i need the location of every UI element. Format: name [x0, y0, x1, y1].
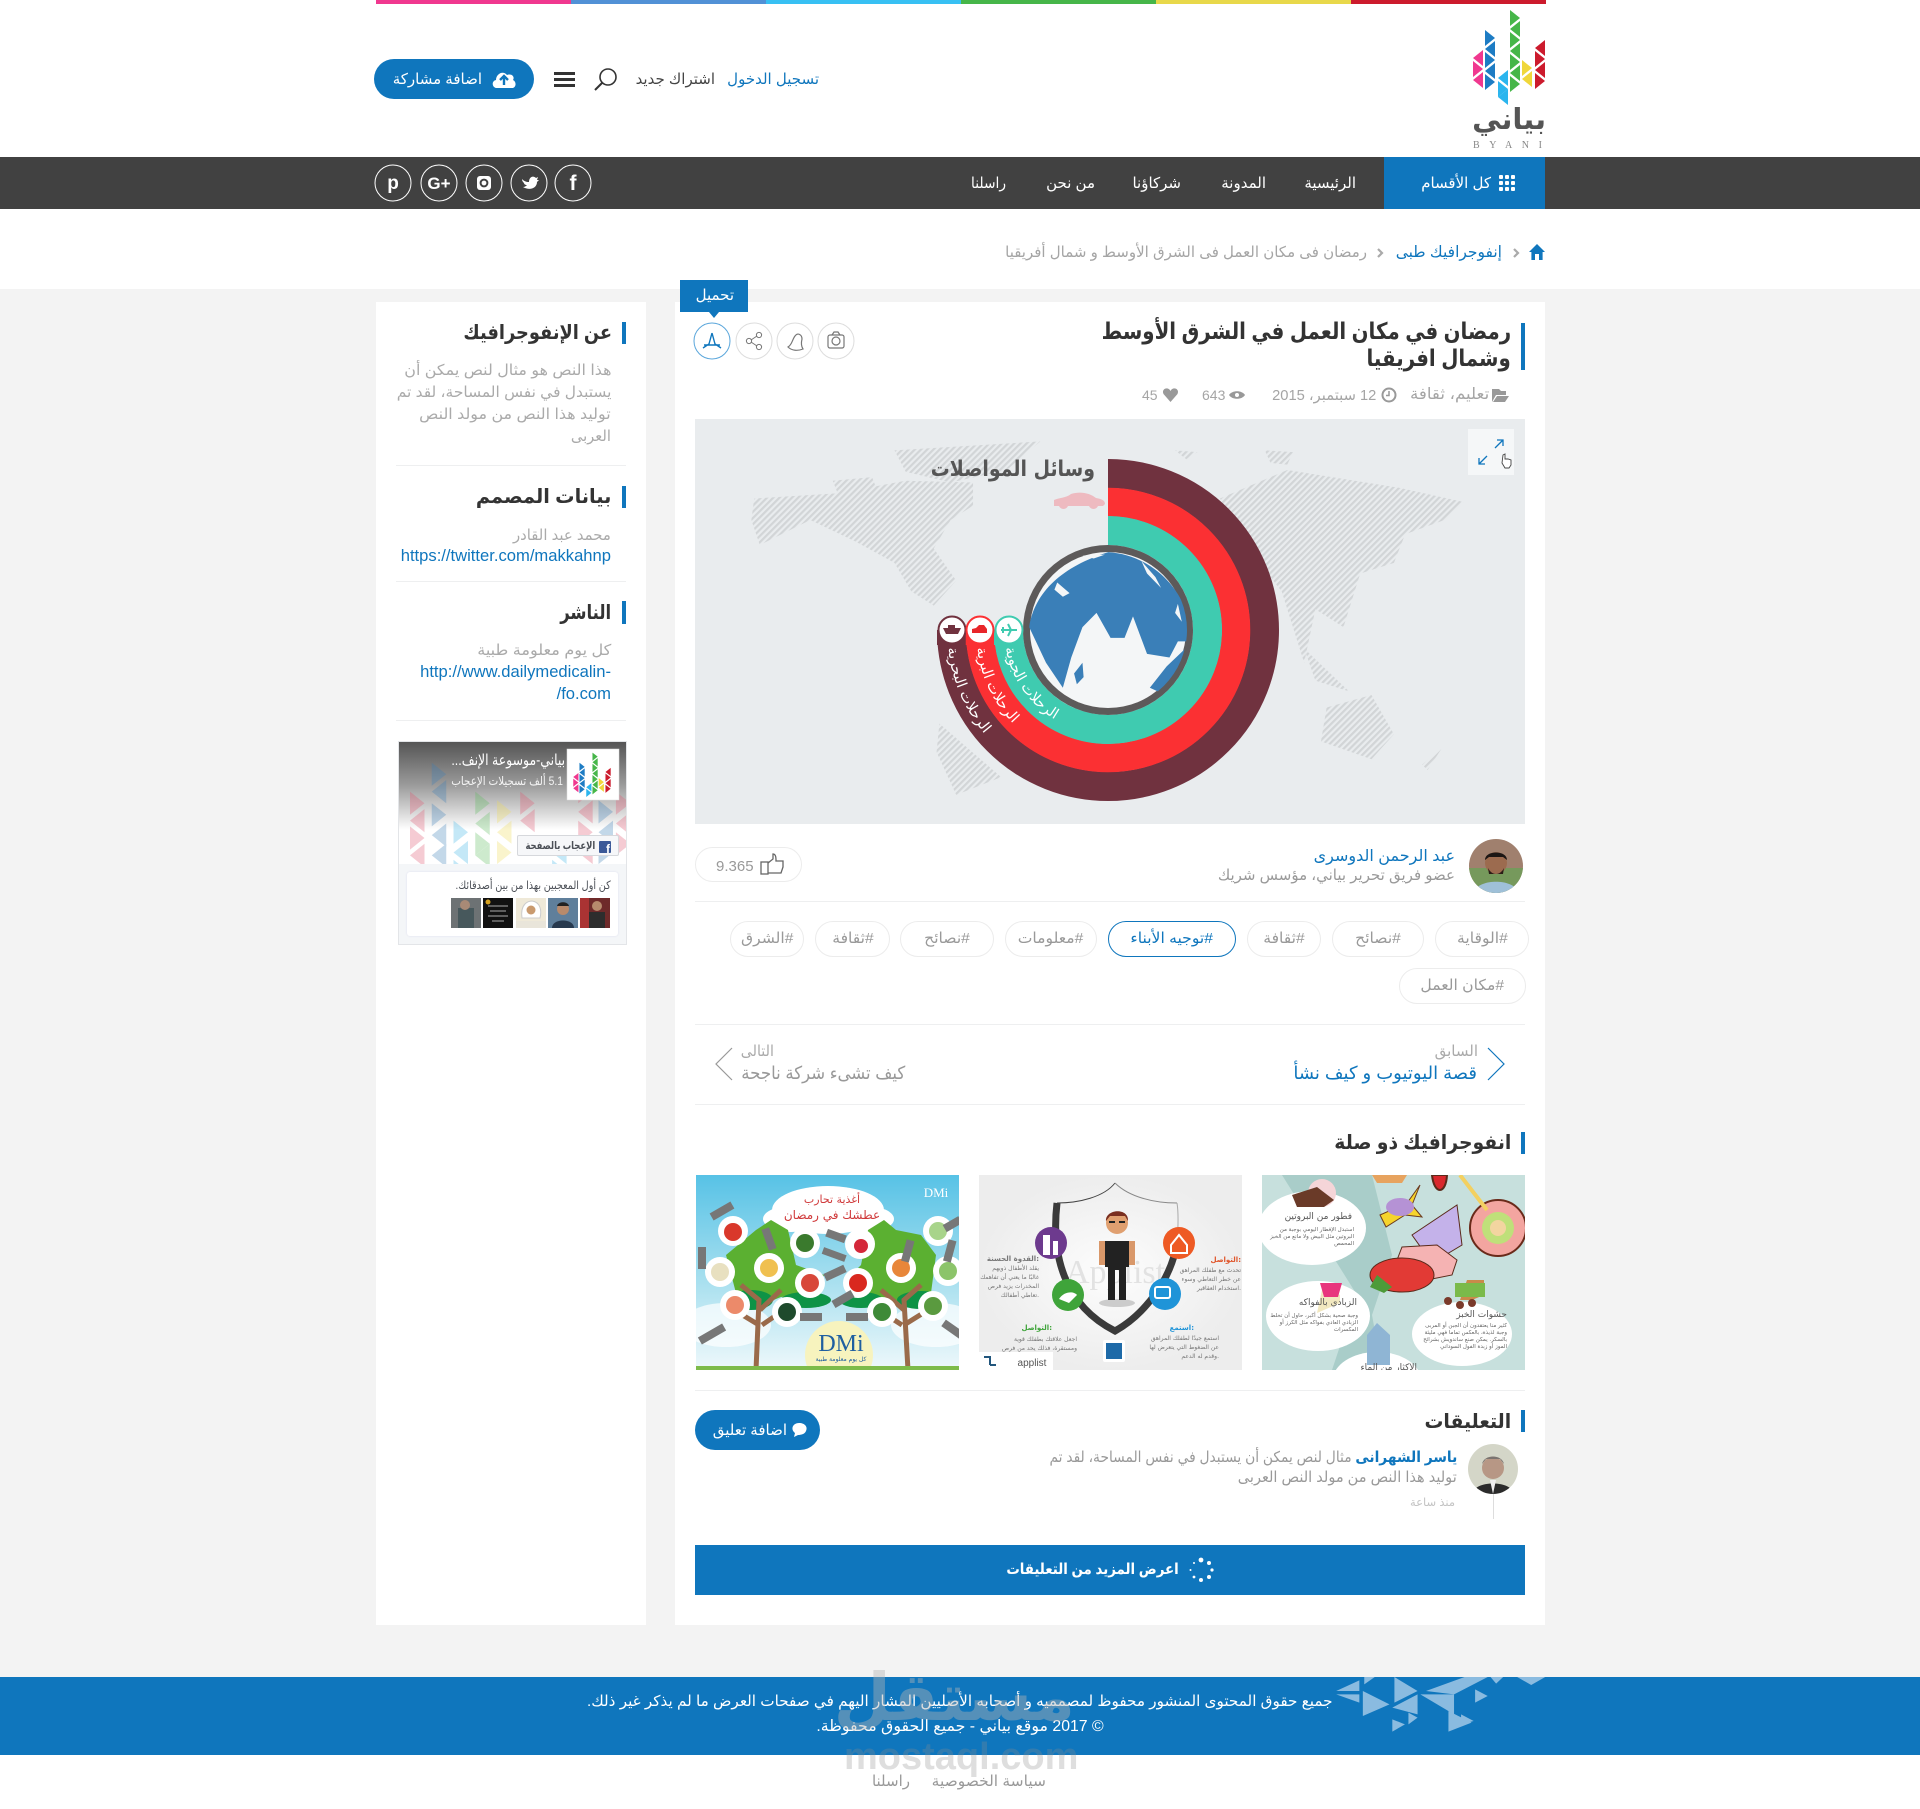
breadcrumb [1005, 242, 1545, 261]
login link: تسجيل الدخول [727, 71, 819, 88]
heading: related infographics: انفوجرافيك ذو صلة [1334, 1132, 1511, 1154]
facebook like button [517, 835, 619, 856]
logo: بياني [1472, 102, 1546, 136]
thumbnail: healthy snacks: فطور من البروتين [1285, 1212, 1352, 1222]
add contribution button [374, 59, 534, 99]
heading: designer data: بيانات المصمم [475, 486, 611, 508]
thumbnail: parenting shield: المخدرات يزيد فرص [988, 1283, 1039, 1290]
panel: sidebar [376, 302, 646, 1625]
world map [740, 430, 1470, 800]
social icons [374, 164, 592, 202]
publisher name: كل يوم معلومة طبية [477, 642, 611, 659]
thumbnail: healthy snacks: المحمص [1334, 1241, 1354, 1247]
all categories tab [1384, 157, 1545, 209]
thumbnail: healthy snacks: الزبادي العادي بفواكه مثل الكرز أو [1279, 1318, 1358, 1326]
tag: tips: #نصائح [1355, 930, 1401, 947]
facebook widget [399, 742, 626, 944]
meta: likes: 45 [1142, 387, 1158, 403]
tags [730, 921, 1529, 1004]
breadcrumb category link: إنفوجرافيك طبى [1396, 244, 1502, 261]
thumbnail: parenting shield: غالبًا ما يعني أن تفاهمك [980, 1273, 1039, 1281]
thumbnail: healthy snacks: الزبادي بالفواكه [1299, 1298, 1357, 1308]
thumbnail: parenting shield: عن الضغوط التي يتعرض لها [1149, 1344, 1219, 1351]
nav: blog: المدونة [1221, 175, 1266, 192]
about paragraph: توليد هذا النص من مولد النص [420, 406, 611, 422]
publisher link [420, 662, 611, 703]
thumbnail: healthy snacks [1262, 1175, 1525, 1370]
facebook page logo [566, 748, 620, 800]
thumbnail: parenting shield: Applist [1065, 1254, 1166, 1291]
next title: كيف تشىء شركة ناجحة [741, 1063, 905, 1083]
ring: air trips [1008, 530, 1208, 730]
ring labels: الرحلات الجوية [1004, 648, 1060, 719]
arrow: next [715, 1048, 732, 1080]
about title: عن الإنفوجرافيك [463, 322, 612, 344]
about paragraph: هذا النص هو مثال لنص يمكن أن [404, 362, 611, 378]
globe [1023, 545, 1193, 715]
thumbnail: food: عطشك في رمضان [784, 1208, 880, 1223]
copyright year line: © 2017 موقع بياني - جميع الحقوق محفوظة. [817, 1718, 1104, 1735]
thumbnail: food: أغذية تحارب [804, 1192, 860, 1206]
button label: اضافة مشاركة [393, 71, 482, 88]
thumbnail: parenting shield [979, 1175, 1242, 1370]
tag: parenting active [1108, 921, 1236, 957]
tag: prevention: #الوقاية [1457, 930, 1507, 947]
load more label: اعرض المزيد من التعليقات [1007, 1561, 1179, 1578]
panel: main article [675, 302, 1545, 1625]
ring: land trips [980, 502, 1236, 758]
watermark arabic: مستقل [834, 1660, 1075, 1734]
likes pill [695, 847, 802, 882]
tag: tips 2 [900, 921, 994, 957]
designer link: https://twitter.com/makkahnp [401, 546, 611, 565]
footer band [0, 1677, 1920, 1755]
comment time: منذ ساعة [1410, 1497, 1455, 1509]
heading: comments: التعليقات [1424, 1411, 1511, 1433]
footer link: contact: راسلنا [872, 1773, 910, 1790]
page background band [0, 289, 1920, 677]
tag: tips 2: #نصائح [924, 930, 970, 947]
tag: east: #الشرق [741, 930, 793, 947]
author role: عضو فريق تحرير بياني، مؤسس شريك [1218, 867, 1455, 884]
fullscreen button [1468, 429, 1514, 475]
action icons [694, 322, 854, 360]
thumbnail: parenting shield: عن خطر التعاطي وسوء [1182, 1276, 1241, 1283]
transport markers [938, 616, 1022, 644]
meta: icons [1163, 388, 1509, 402]
tag: tips [1332, 921, 1424, 957]
logo: BYANI [1473, 140, 1552, 151]
breadcrumb current page: رمضان فى مكان العمل فى الشرق الأوسط و شمال أفريقيا [1005, 244, 1367, 261]
tag: culture: #ثقافة [1263, 930, 1305, 947]
icon: cloud upload [492, 72, 516, 88]
nav: about: من نحن [1046, 175, 1095, 192]
previous title: قصة اليوتيوب و كيف نشأ [1293, 1063, 1477, 1083]
facebook cover [399, 742, 626, 864]
thumbnail: parenting shield: تعاطي أطفالك. [1001, 1291, 1039, 1299]
thumbnail: parenting shield: تحدث مع طفلك المراهق [1180, 1267, 1241, 1274]
friend photos [451, 898, 610, 928]
article meta row [1142, 386, 1509, 404]
navigation bar [0, 157, 1920, 209]
footer link: privacy: سياسة الخصوصية [932, 1773, 1046, 1790]
tag: prevention [1435, 921, 1529, 957]
next label: التالى [741, 1043, 774, 1060]
next article [715, 1043, 906, 1084]
tag: workplace [1399, 968, 1526, 1004]
social icons: f [570, 172, 578, 195]
likes count: 9.365 [716, 858, 754, 875]
author avatar [1469, 839, 1523, 893]
previous label: السابق [1435, 1043, 1478, 1060]
thumbnail: healthy snacks: وجبة صحية بشكل أكبر، حاول أن تخلط [1270, 1311, 1358, 1319]
icon: speech bubble [792, 1423, 807, 1437]
icon: spinner [1190, 1558, 1214, 1582]
copyright line: جميع حقوق المحتوى المنشور محفوظ لمصمميه و أصحابه الأصليين المشار اليهم في صفحات العرض ما لم يذكر غير ذلك. [587, 1693, 1333, 1710]
thumbnail: parenting shield: التواصل: [1210, 1256, 1241, 1264]
meta: date: 12 سبتمبر، 2015 [1272, 387, 1376, 404]
icon: facebook: f [606, 842, 611, 856]
ring labels: الرحلات البرية [975, 648, 1020, 722]
author name: عبد الرحمن الدوسرى [1314, 848, 1455, 865]
previous article [1293, 1043, 1505, 1084]
social icons: G+ [427, 174, 451, 193]
download label: تحميل [696, 287, 734, 304]
comment text: توليد هذا النص من مولد النص العربى [1238, 1469, 1457, 1486]
icon: facebook [599, 841, 611, 856]
commenter avatar [1468, 1444, 1518, 1494]
thumbnail: healthy snacks: البروتين مثل البيض ولا مانع من الخبز [1269, 1234, 1354, 1240]
thumbnail: parenting shield: applist [1018, 1358, 1047, 1369]
like label: الإعجاب بالصفحة [525, 840, 595, 852]
chart title: وسائل المواصلات [931, 456, 1095, 481]
thumbnail: food: DMi [818, 1331, 864, 1357]
heading: publisher: الناشر [560, 602, 611, 624]
watermark latin: mostaql.com [844, 1736, 1078, 1778]
thumbnail: food: كل يوم معلومة طبية [816, 1356, 867, 1363]
social icons: p [387, 173, 399, 194]
infographic image [695, 419, 1525, 824]
tag: workplace: #مكان العمل [1421, 977, 1504, 994]
icon: menu [554, 72, 575, 87]
tag: culture 2: #ثقافة [832, 930, 873, 947]
comment text: ياسر الشهرانى مثال لنص يمكن أن يستبدل في نفس المساحة، لقد تم [1049, 1449, 1457, 1466]
thumbnail: food: DMi [924, 1185, 949, 1200]
facebook page name: بياني-موسوعة الإنف... [451, 752, 565, 769]
article title [1102, 317, 1511, 372]
heading: about [396, 322, 626, 444]
nav: contact: راسلنا [971, 175, 1006, 192]
facebook likes count: 5.1 ألف تسجيلات الإعجاب [451, 774, 563, 788]
thumbnail: healthy snacks: حشوات الخبز [1455, 1310, 1507, 1320]
icon: search [594, 68, 617, 91]
friends line: كن أول المعجبين بهذا من بين أصدقائك. [456, 880, 611, 892]
ring labels: الرحلات البحرية [946, 648, 992, 733]
logo [1472, 10, 1552, 151]
designer name: محمد عبد القادر [513, 527, 611, 544]
icon: car [1054, 493, 1105, 509]
signup link: اشتراك جديد [636, 71, 715, 88]
about paragraph: العربى [571, 428, 611, 444]
meta: views: 643 [1202, 387, 1225, 403]
article title: رمضان في مكان العمل في الشرق الأوسط [1102, 318, 1511, 344]
download tab [680, 280, 748, 318]
thumbnail: parenting shield: وقدم له الدعم. [1181, 1353, 1219, 1360]
ring labels [946, 648, 1060, 733]
watermark [834, 1660, 1078, 1778]
about paragraph [396, 360, 611, 444]
tag: parenting active: #توجيه الأبناء [1131, 930, 1213, 947]
thumbnail: healthy snacks: المكسرات [1334, 1326, 1358, 1333]
about paragraph: يستبدل في نفس المساحة، لقد تم [396, 384, 611, 400]
thumbnail: parenting shield: القدوة الحسنة: [987, 1255, 1039, 1263]
ring: sea trips [952, 474, 1264, 786]
tag: information [1005, 921, 1097, 957]
thumbnail: parenting shield: التواصل: [1022, 1324, 1052, 1332]
icon: thumbs up [760, 853, 784, 875]
tag: information: #معلومات [1018, 930, 1084, 947]
load more comments bar [695, 1545, 1525, 1595]
thumbnail: parenting shield: يقلد الأطفال ذويهم [992, 1264, 1039, 1272]
article title: وشمال افريقيا [1367, 345, 1511, 371]
thumbnail: healthy snacks: وجبة لذيذة، بالعكس تماما فهي مليئة [1425, 1329, 1507, 1336]
thumbnail: parenting shield: استخدام العقاقير. [1196, 1285, 1241, 1292]
nav: all categories: كل الأقسام [1421, 175, 1491, 192]
meta: category: تعليم، ثقافة [1410, 386, 1489, 403]
facebook friends card [407, 872, 618, 936]
thumbnail: healthy snacks: كثير منا يعتقدون أن الجبن أو المربى [1425, 1321, 1507, 1329]
tag: culture 2 [815, 921, 890, 957]
nav: home: الرئيسية [1304, 175, 1356, 192]
comment text [1049, 1447, 1457, 1486]
thumbnail: parenting shield: استمع: [1170, 1324, 1194, 1332]
thumbnail: healthy snacks: بالسكر. يمكن صنع ساندويش بشرائح [1423, 1336, 1507, 1343]
thumbnail: healthy snacks: الموز أو زبدة الفول السوداني [1440, 1342, 1507, 1350]
tag: east [730, 921, 804, 957]
nav: partners: شركاؤنا [1132, 175, 1181, 192]
thumbnail: parenting shield: اجعل علاقتك بطفلك قوية [1014, 1336, 1077, 1343]
publisher link: http://www.dailymedicalin- [420, 662, 611, 681]
icon: grid [1499, 175, 1515, 191]
add comment button [695, 1410, 820, 1450]
thumbnail: food [696, 1175, 959, 1370]
thumbnail: healthy snacks: استبدل الإفطار اليومي بوجبة من [1280, 1227, 1354, 1233]
thumbnail: healthy snacks: الاكثار من الماء [1360, 1363, 1417, 1373]
icon: home [1529, 244, 1545, 260]
thumbnail: parenting shield: ومستقرة، فذلك يحد من فرص [1002, 1345, 1077, 1352]
button label: اضافة تعليق [713, 1422, 787, 1439]
publisher link: /fo.com [557, 684, 611, 703]
thumbnail: parenting shield: استمع جيدًا لطفلك المراهق [1151, 1335, 1219, 1342]
tag: culture [1247, 921, 1321, 957]
arrow: previous [1488, 1048, 1505, 1080]
top colour stripe [376, 0, 1546, 4]
footer triangles [1336, 1677, 1545, 1732]
